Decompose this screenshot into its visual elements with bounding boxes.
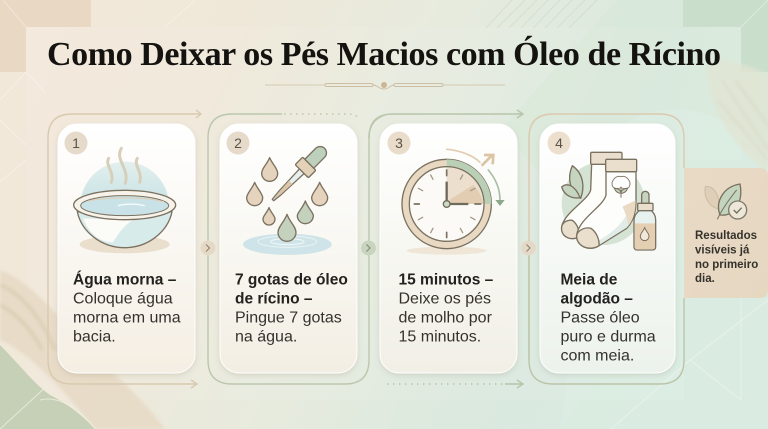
badge 4: 4: [555, 135, 563, 151]
results panel background: [684, 168, 768, 298]
card 3 background: [380, 124, 517, 373]
step 1 text: Coloque água: [73, 290, 173, 307]
card 1 background: [58, 124, 195, 373]
badge 2: 2: [234, 135, 242, 151]
card 2 background: [220, 124, 357, 373]
step 4 text: com meia.: [560, 347, 634, 364]
step 3 text: 15 minutos.: [398, 328, 481, 345]
title ornament divider: [265, 82, 505, 89]
results text: visíveis já: [695, 244, 750, 256]
step frame 4: [529, 114, 684, 384]
step 2 text: de rícino –: [235, 290, 313, 307]
title: Como Deixar os Pés Macios com Óleo de Rícino: [47, 35, 721, 73]
icon: dropper and drops: [243, 142, 332, 255]
step 3 text: Deixe os pés: [398, 290, 491, 307]
card 2: castor oil drops: [220, 124, 357, 373]
decorative leaf bottom left: [0, 345, 95, 429]
step 3 text: 15 minutos –: [398, 271, 494, 288]
decorative feather bottom left: [0, 270, 165, 429]
step 4 text: algodão –: [560, 290, 633, 307]
card 3: fifteen minutes: [380, 124, 517, 373]
results text: Resultados: [695, 230, 757, 242]
step 4 text: puro e durma: [560, 328, 656, 345]
step 1 text: Água morna –: [73, 271, 177, 288]
panel: results: [684, 168, 768, 298]
badge 3: [388, 132, 410, 154]
badge 1: [64, 132, 88, 154]
icon: clock with arrows: [402, 149, 505, 255]
icon: leaves with check: [705, 184, 747, 219]
connector 2: [361, 240, 376, 256]
results text: no primeiro: [695, 259, 758, 271]
step 1 text: morna em uma: [73, 309, 181, 326]
step 2 text: 7 gotas de óleo: [235, 271, 348, 288]
badge 2: [226, 132, 250, 154]
card 4: cotton sock: [540, 124, 675, 373]
step 4 text: Passe óleo: [560, 309, 640, 326]
card 1: warm water: [58, 124, 195, 373]
badge 3: 3: [395, 135, 403, 151]
badge 4: [548, 132, 570, 154]
connector 1: [200, 240, 216, 256]
decorative feather top right: [708, 60, 768, 172]
step 2 text: Pingue 7 gotas: [235, 309, 342, 326]
step frame 1: [48, 110, 201, 388]
results text: dia.: [695, 273, 715, 285]
connector 3: [521, 240, 536, 256]
icon: socks, leaves and oil bottle: [562, 152, 656, 250]
badge 1: 1: [72, 135, 80, 151]
step 4 text: Meia de: [560, 271, 618, 288]
step frame 3: [369, 110, 523, 388]
icon: bowl with steam: [74, 148, 176, 253]
card 4 background: [540, 124, 675, 373]
step 2 text: na água.: [235, 328, 297, 345]
step 1 text: bacia.: [73, 328, 116, 345]
step 3 text: de molho por: [398, 309, 493, 326]
step frame 2: [208, 114, 385, 384]
